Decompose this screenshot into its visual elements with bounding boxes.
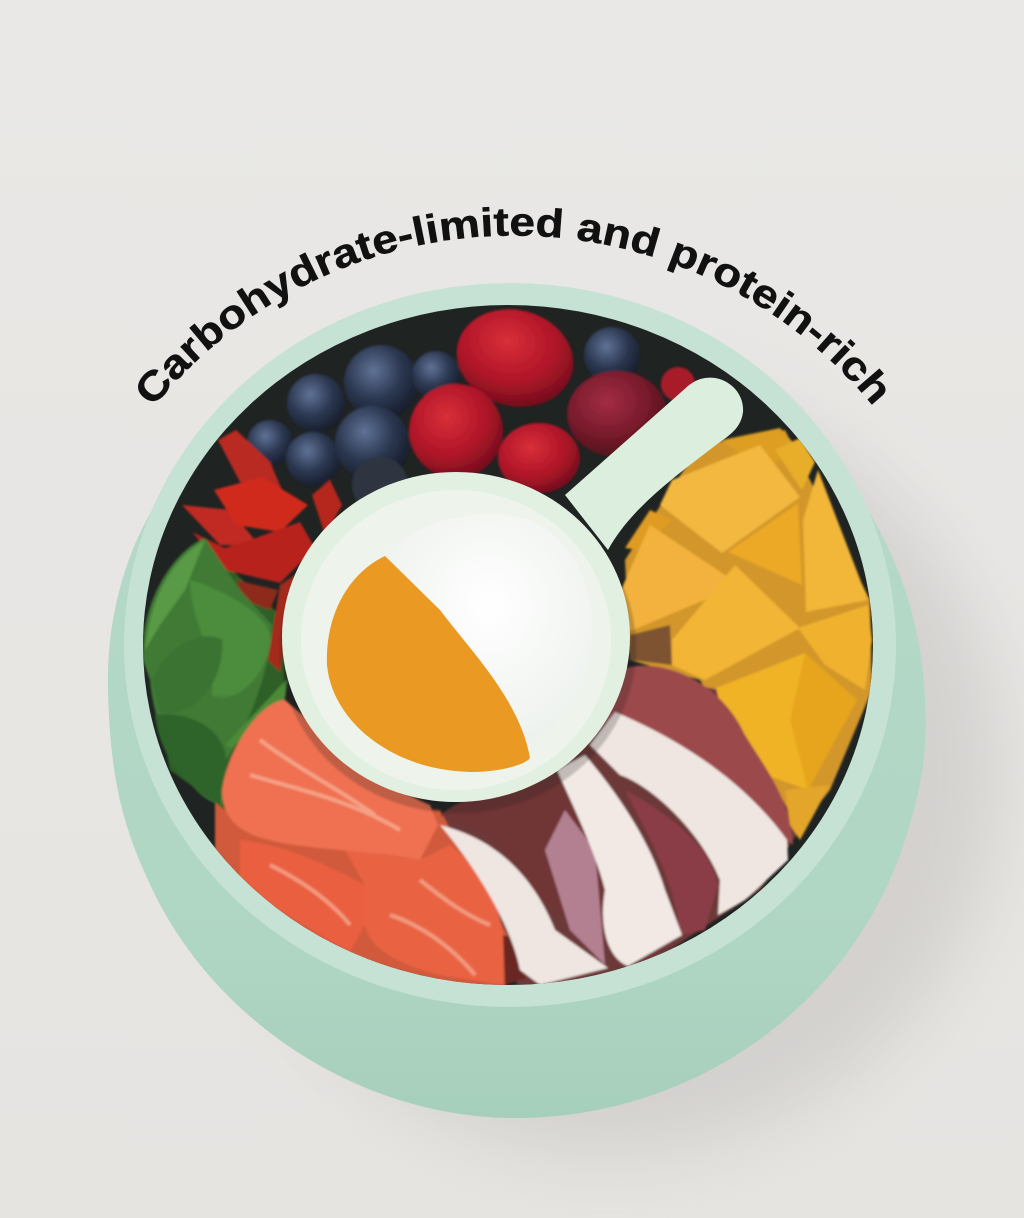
spinach <box>143 538 288 805</box>
curved heading: Carbohydrate-limited and protein-rich <box>138 206 886 405</box>
scoop <box>282 378 743 802</box>
mango cubes <box>621 428 872 840</box>
orange powder <box>327 556 530 772</box>
scoop cup <box>282 472 630 802</box>
bowl contents <box>143 296 872 990</box>
duck meat <box>440 666 793 985</box>
illustration: bowl of food with curved heading <box>108 206 1011 1169</box>
white powder <box>385 514 593 745</box>
goji berries <box>182 430 342 672</box>
blueberries <box>247 327 640 513</box>
food underlays <box>145 430 872 990</box>
bowl shadow <box>220 385 1000 1155</box>
salmon <box>222 700 504 985</box>
scoop shadow <box>280 585 636 813</box>
cranberries <box>409 296 695 493</box>
scoop handle <box>565 378 743 550</box>
bowl <box>108 283 926 1118</box>
